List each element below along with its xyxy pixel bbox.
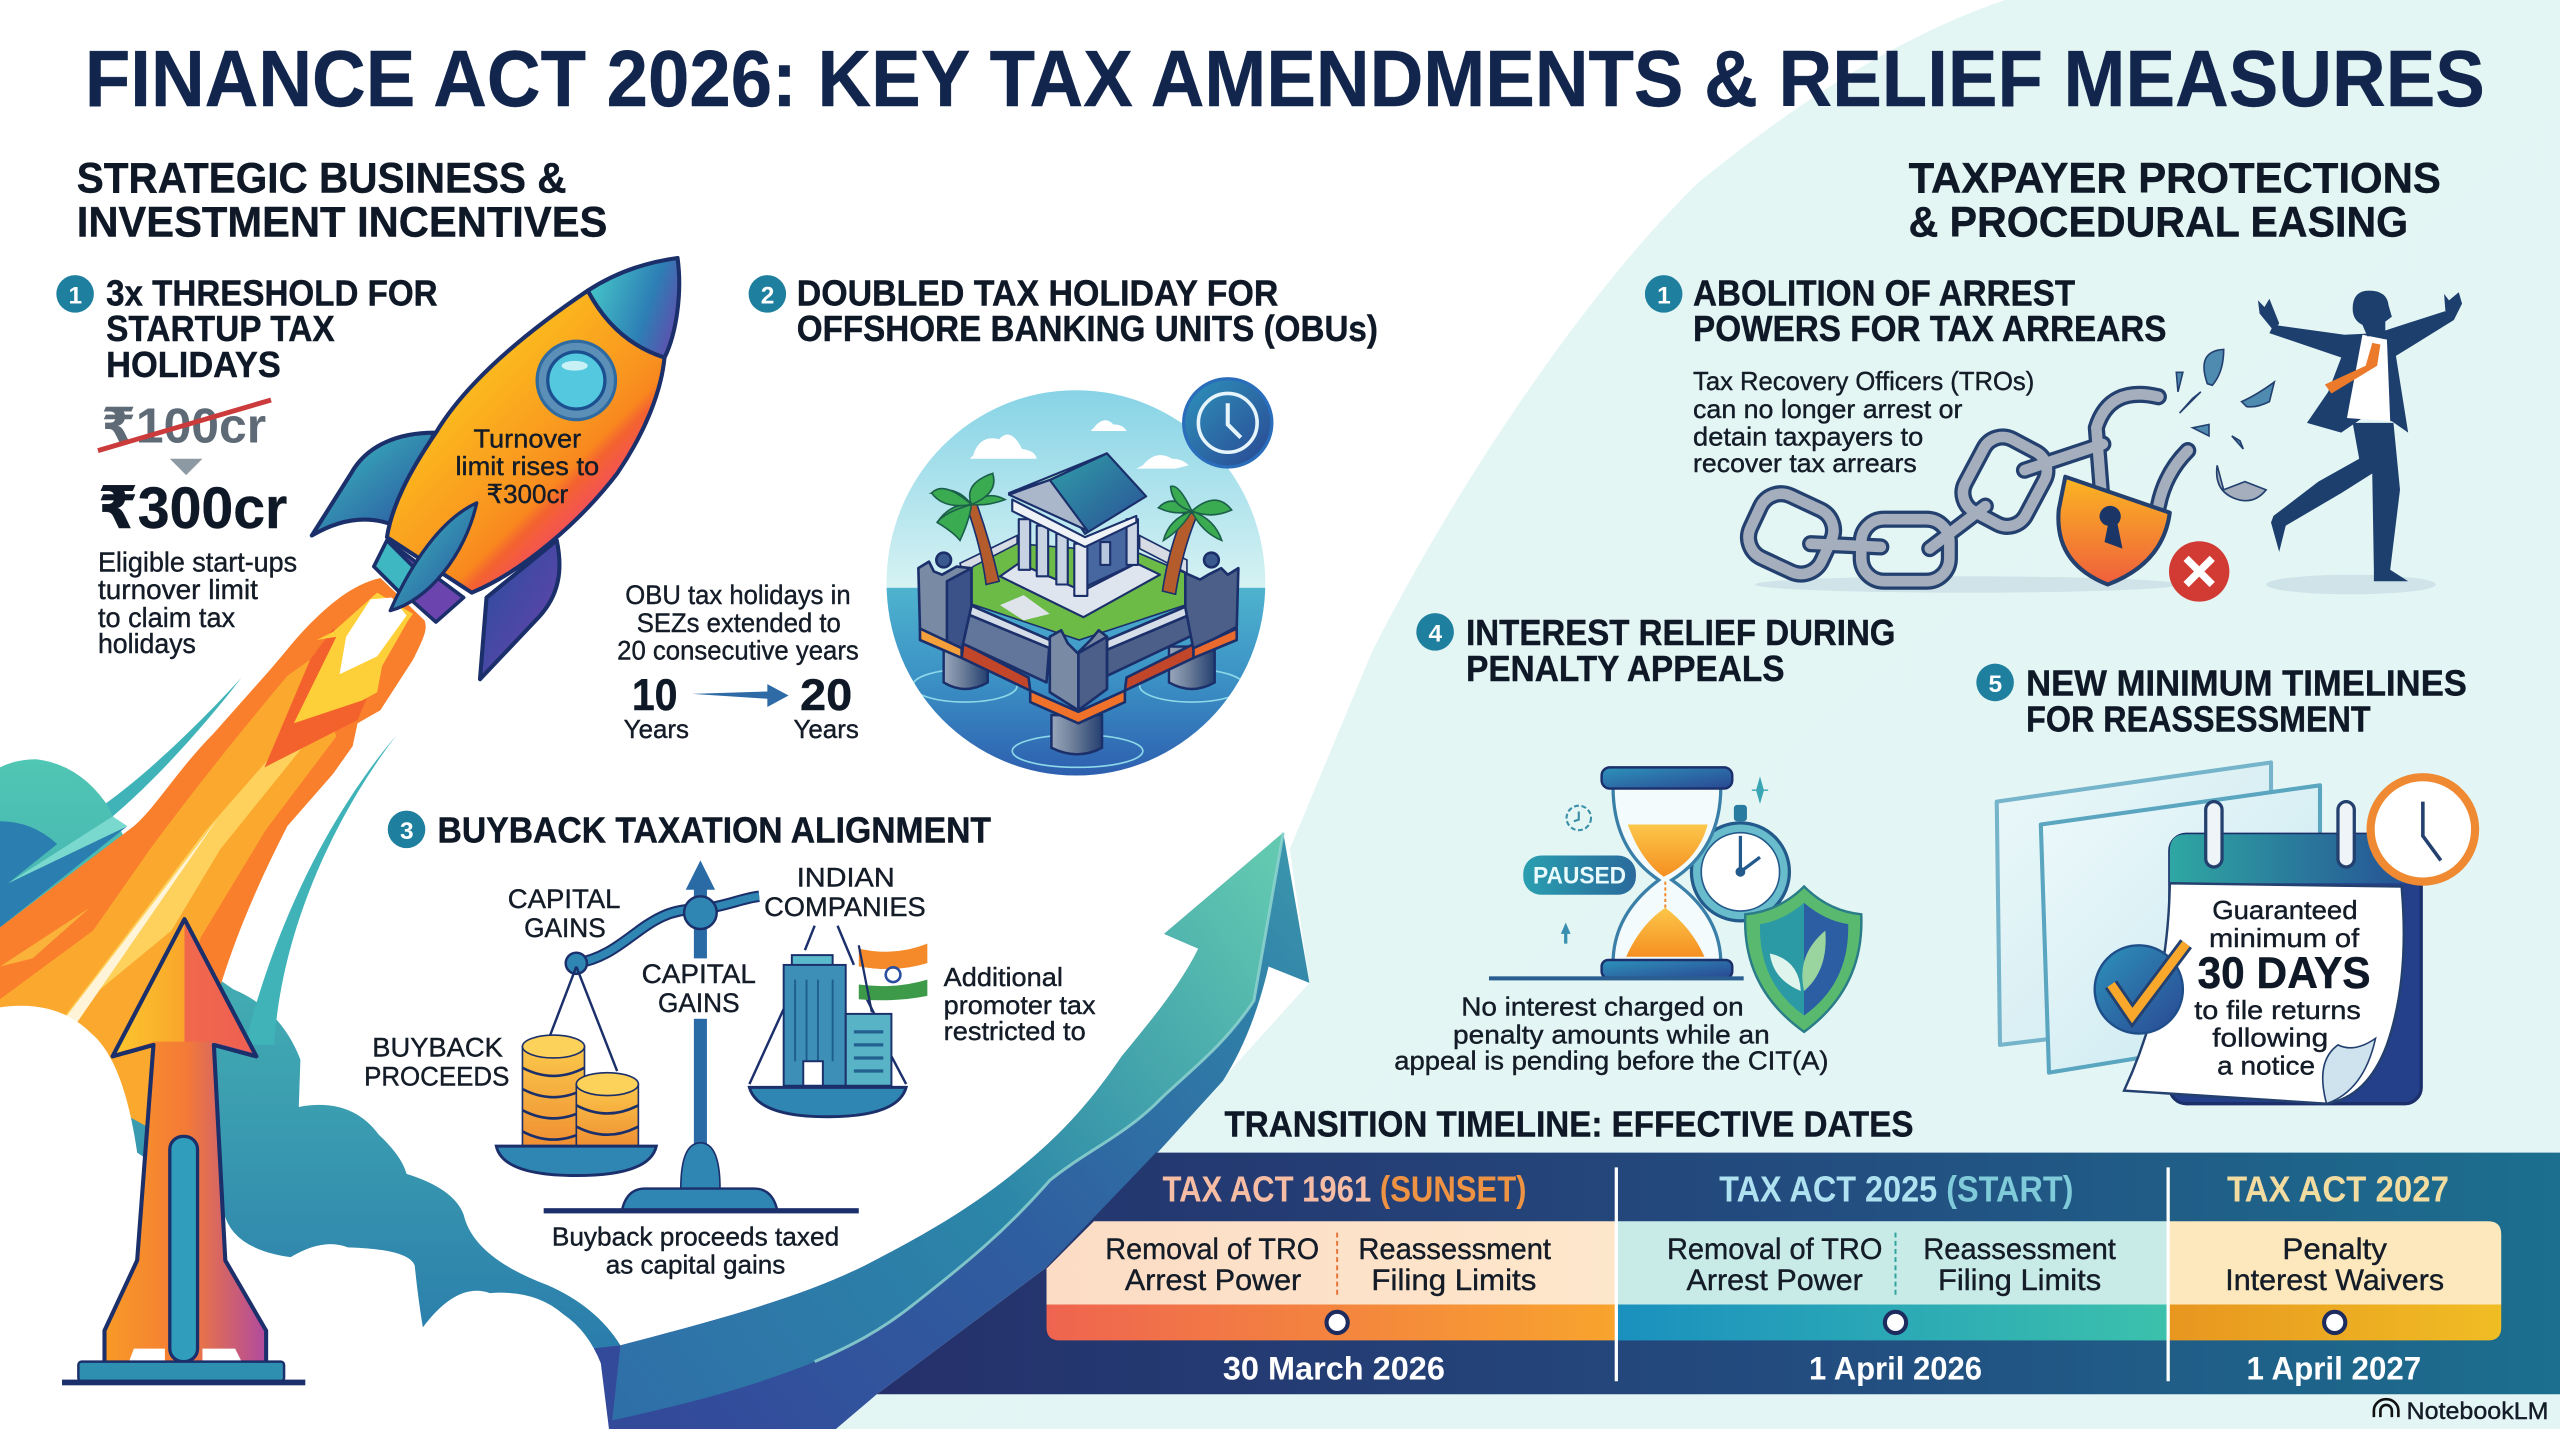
badge 2: 2 <box>761 283 774 310</box>
icon: broken chain <box>1741 394 2188 582</box>
badge 1 <box>56 275 94 313</box>
startup description: holidays <box>98 628 196 659</box>
protection 1: abolition of arrest <box>1645 272 2462 602</box>
icon: down triangle <box>170 459 202 475</box>
panel: transition timeline <box>877 1153 2560 1394</box>
startup heading <box>106 272 438 385</box>
paused pill <box>1523 856 1636 895</box>
timeline dividers <box>1616 1167 2168 1381</box>
section 1: startup threshold <box>56 272 438 659</box>
calendar text: to file returns <box>2194 995 2361 1025</box>
timeline row backgrounds <box>1047 1221 2501 1340</box>
badge 2 <box>749 275 786 313</box>
column: tax act 2027: 1 April 2027 <box>2247 1350 2421 1387</box>
shadows under chain and man <box>1755 575 2436 594</box>
scale labels: CAPITAL <box>642 959 756 989</box>
OBU heading: DOUBLED TAX HOLIDAY FOR <box>797 272 1278 313</box>
scale labels: PROCEEDS <box>364 1062 509 1092</box>
column: tax act 1961: Arrest Power <box>1125 1264 1301 1297</box>
calendar text: following <box>2212 1023 2328 1053</box>
back walls <box>960 536 1187 575</box>
arrest description: detain taxpayers to <box>1693 422 1923 452</box>
badge 1 right <box>1645 275 1682 313</box>
column: tax act 2027: TAX ACT 2027 <box>2227 1169 2449 1210</box>
10 years stat: 10 <box>632 671 678 720</box>
rocket nozzle <box>374 540 464 622</box>
white foreground cloud <box>0 1006 609 1429</box>
timeline background <box>877 1153 2560 1394</box>
man jacket and arms <box>2269 311 2454 433</box>
scale labels: GAINS <box>658 988 740 1018</box>
badge 5 <box>1976 664 2014 701</box>
icon: clock on calendar <box>2371 777 2475 882</box>
icon: chain shards <box>2176 349 2274 501</box>
scale labels <box>364 863 926 1092</box>
arrest heading <box>1693 272 2167 349</box>
promoter tax note: promoter tax <box>944 990 1096 1020</box>
badge 4 <box>1416 613 1454 651</box>
icon: padlock <box>2058 477 2170 584</box>
reassessment heading: FOR REASSESSMENT <box>2026 698 2371 739</box>
calendar text: minimum of <box>2209 923 2360 953</box>
big swoosh arrow <box>560 833 1309 1429</box>
icon: fortified island bank <box>882 379 1273 780</box>
startup heading: STARTUP TAX <box>106 308 335 349</box>
column: tax act 1961 <box>1105 1169 1551 1387</box>
rocket label: ₹300cr <box>487 479 568 509</box>
teal cloud backdrop <box>0 759 620 1429</box>
icon: stopwatch <box>1691 805 1789 921</box>
badge 1 right: 1 <box>1657 283 1671 310</box>
buyback heading: BUYBACK TAXATION ALIGNMENT <box>438 809 991 850</box>
icon: indian flag <box>859 944 927 1012</box>
OBU description: SEZs extended to <box>637 608 841 638</box>
green deck <box>957 544 1203 640</box>
balance scale <box>544 860 906 1213</box>
column: tax act 1961: Reassessment <box>1358 1233 1551 1266</box>
column: tax act 1961: TAX ACT 1961 (SUNSET) <box>1162 1169 1527 1210</box>
badge 3: 3 <box>400 818 414 845</box>
arrest description: Tax Recovery Officers (TROs) <box>1693 366 2034 396</box>
icon: clock badge <box>1184 379 1272 467</box>
scale labels: GAINS <box>524 913 606 943</box>
interest relief heading <box>1466 612 1896 689</box>
fortress walls <box>918 553 1238 723</box>
column: tax act 2027: Penalty <box>2282 1233 2387 1266</box>
promoter tax note <box>944 962 1096 1046</box>
icon: check badge <box>2095 944 2186 1033</box>
column: tax act 2025: Removal of TRO <box>1667 1233 1882 1266</box>
man legs <box>2271 423 2408 581</box>
column: tax act 2025: 1 April 2026 <box>1809 1350 1982 1387</box>
startup heading: HOLIDAYS <box>106 344 281 385</box>
rocket porthole <box>537 341 616 420</box>
interest relief heading: PENALTY APPEALS <box>1466 648 1784 689</box>
platform pillars <box>944 647 1215 754</box>
calendar text <box>2194 895 2371 1080</box>
buyback caption: as capital gains <box>606 1249 785 1279</box>
background: mint right region <box>816 0 2560 1429</box>
new threshold: ₹300cr <box>98 476 287 541</box>
arrest description <box>1693 366 2034 478</box>
calendar text: Guaranteed <box>2212 895 2358 925</box>
arrest description: recover tax arrears <box>1693 448 1917 478</box>
scale labels: INDIAN <box>797 863 895 893</box>
icon: shield with leaf <box>1745 887 1861 1032</box>
icon: dashed clock <box>1567 806 1591 830</box>
10 years stat: Years <box>624 714 689 744</box>
icon: freed man <box>2258 291 2462 581</box>
column: tax act 1961: 30 March 2026 <box>1223 1350 1445 1387</box>
badge 5: 5 <box>1989 671 2002 698</box>
buildings <box>784 955 891 1086</box>
column: tax act 2025: Arrest Power <box>1687 1264 1863 1297</box>
scale labels: BUYBACK <box>372 1032 503 1062</box>
arrest heading: POWERS FOR TAX ARREARS <box>1693 308 2167 349</box>
OBU heading: OFFSHORE BANKING UNITS (OBUs) <box>797 308 1378 349</box>
icon: launch arrow rocket <box>62 919 305 1385</box>
heading: strategic business and investment incentives <box>77 155 607 246</box>
scale labels: CAPITAL <box>508 884 620 914</box>
badge 4: 4 <box>1429 621 1443 648</box>
protection 5: reassessment timelines <box>1976 663 2475 1104</box>
arrest heading: ABOLITION OF ARREST <box>1693 272 2075 313</box>
buyback caption <box>552 1222 839 1279</box>
heading: taxpayer protections and procedural easing: TAXPAYER PROTECTIONS <box>1909 155 2441 202</box>
paused pill: PAUSED <box>1533 863 1626 889</box>
man tie <box>2325 343 2380 393</box>
arrest description: can no longer arrest or <box>1693 394 1963 424</box>
heading: taxpayer protections and procedural easing <box>1909 155 2441 246</box>
icon: up arrow <box>1561 922 1571 944</box>
promoter tax note: restricted to <box>944 1016 1086 1046</box>
rocket exhaust flame <box>0 578 426 1127</box>
heading: strategic business and investment incentives: STRATEGIC BUSINESS & <box>77 155 567 202</box>
column: tax act 2025: Reassessment <box>1923 1233 2116 1266</box>
badge 1: 1 <box>69 283 82 310</box>
20 years stat: Years <box>793 714 859 744</box>
bank building <box>1000 453 1160 617</box>
OBU description <box>617 580 859 666</box>
20 years stat: 20 <box>800 671 852 720</box>
left scale pan <box>496 1146 656 1176</box>
interest relief description: appeal is pending before the CIT(A) <box>1394 1045 1829 1075</box>
rocket right fin <box>480 540 559 679</box>
reassessment heading: NEW MINIMUM TIMELINES <box>2026 663 2467 704</box>
20 years stat <box>793 671 859 744</box>
man shirt <box>2347 335 2390 421</box>
startup description: to claim tax <box>98 602 235 633</box>
badge 3 <box>388 811 425 848</box>
column: tax act 1961: Filing Limits <box>1371 1264 1536 1297</box>
column: tax act 2025: TAX ACT 2025 (START) <box>1719 1169 2073 1210</box>
startup description <box>98 546 297 659</box>
column: tax act 2025 <box>1667 1169 2116 1387</box>
column: tax act 1961: Removal of TRO <box>1105 1233 1319 1266</box>
rocket center fin <box>390 503 477 611</box>
protection 4: interest relief <box>1394 612 1896 1075</box>
coin stacks <box>522 1035 638 1146</box>
icon: glass panels <box>1997 762 2320 1073</box>
palm trees <box>932 473 1232 594</box>
heading: strategic business and investment incentives: INVESTMENT INCENTIVES <box>77 199 607 246</box>
interest relief description: No interest charged on <box>1461 992 1744 1022</box>
10 years stat <box>624 671 689 744</box>
rocket <box>312 258 679 679</box>
startup description: Eligible start-ups <box>98 546 297 577</box>
OBU description: OBU tax holidays in <box>625 580 851 610</box>
right scale pan <box>749 1087 906 1117</box>
icon: calendar <box>2124 802 2421 1104</box>
interest relief heading: INTEREST RELIEF DURING <box>1466 612 1896 653</box>
column: tax act 2027: Interest Waivers <box>2225 1264 2444 1297</box>
icon: hourglass <box>1489 767 1744 980</box>
old threshold struck out: ₹100cr <box>101 399 266 453</box>
teal speed streaks <box>106 678 397 1045</box>
rocket label: Turnover <box>473 423 582 453</box>
OBU description: 20 consecutive years <box>617 636 859 666</box>
man head <box>2353 291 2392 336</box>
icon: sparkle <box>1752 779 1768 802</box>
section 2: offshore banking units <box>617 272 1378 780</box>
rocket body <box>387 291 664 593</box>
heading: taxpayer protections and procedural easing: & PROCEDURAL EASING <box>1909 199 2408 246</box>
icon: red x <box>2169 541 2229 602</box>
buyback caption: Buyback proceeds taxed <box>552 1222 839 1252</box>
column: tax act 2025: Filing Limits <box>1938 1264 2101 1297</box>
man hands <box>2258 292 2462 331</box>
OBU heading <box>797 272 1378 349</box>
section 3: buyback taxation <box>364 809 1096 1279</box>
rocket label <box>456 423 599 509</box>
timeline heading: TRANSITION TIMELINE: EFFECTIVE DATES <box>1224 1103 1913 1144</box>
calendar text: 30 DAYS <box>2198 949 2371 998</box>
calendar text: a notice <box>2217 1050 2315 1080</box>
rocket nose cone <box>588 258 679 358</box>
interest relief description <box>1394 992 1829 1075</box>
promoter tax note: Additional <box>944 962 1063 992</box>
startup description: turnover limit <box>98 574 258 605</box>
interest relief description: penalty amounts while an <box>1453 1019 1770 1049</box>
rocket label: limit rises to <box>456 451 599 481</box>
arrow: 10 to 20 years <box>692 684 789 707</box>
reassessment heading <box>2026 663 2467 739</box>
scale labels: COMPANIES <box>764 892 926 922</box>
startup heading: 3x THRESHOLD FOR <box>106 272 438 313</box>
rocket left fin <box>312 433 434 536</box>
notebooklm watermark: NotebookLM <box>2407 1398 2549 1425</box>
column: tax act 2027 <box>2225 1169 2449 1387</box>
